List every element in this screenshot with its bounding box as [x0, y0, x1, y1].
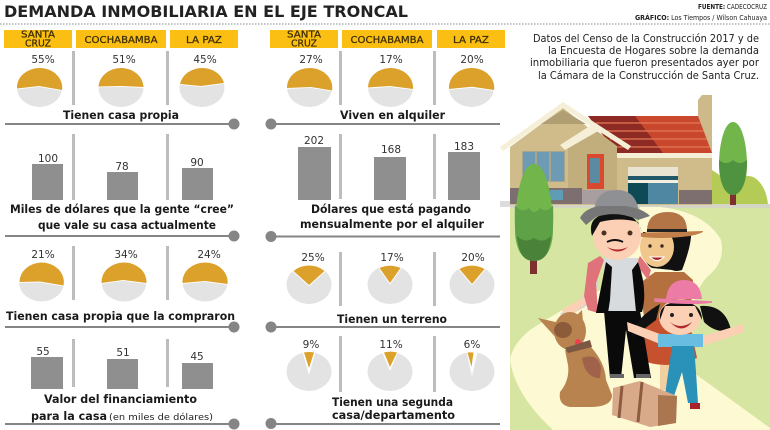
header: right city labels: COCHABAMBA: [350, 35, 424, 46]
panel: tienen casa propia: [5, 51, 240, 130]
hedge: [712, 170, 768, 204]
panel: miles de dolares casa: [5, 134, 240, 242]
label: Miles de dólares que la gente “cree”: [10, 202, 234, 216]
head: [593, 212, 641, 260]
label: [332, 395, 455, 422]
path: [510, 207, 770, 430]
header: left city labels: CRUZ: [25, 38, 51, 50]
pie: Cochabamba 17%: [368, 54, 413, 107]
pie: Santa Cruz 27%: 27%: [299, 54, 323, 66]
bar: La Paz 90: [182, 157, 213, 200]
bar: Cochabamba 78: 78: [115, 161, 129, 173]
pie: Cochabamba 17%: [368, 252, 412, 304]
pie: Cochabamba 11%: [368, 339, 412, 391]
body patch: [582, 356, 601, 378]
door: [587, 154, 604, 189]
pie: Cochabamba 17%: 17%: [379, 54, 403, 66]
pie: Santa Cruz 25%: [286, 252, 332, 304]
title: DEMANDA INMOBILIARIA EN EL EJE TRONCAL: [4, 2, 408, 21]
bar: La Paz 45: [182, 351, 213, 389]
pie: La Paz 45%: [180, 54, 224, 107]
bar: Santa Cruz 202: [298, 135, 331, 200]
label: Tienen casa propia que la compraron: [6, 309, 235, 323]
intro text: inmobiliaria que fueron presentados ayer por: [530, 57, 760, 69]
panel: segunda casa: [266, 336, 500, 429]
label: Tienen casa propia: [63, 108, 179, 122]
arm: [560, 273, 598, 318]
bar: Cochabamba 78: [107, 161, 138, 200]
tree left: [515, 164, 553, 274]
man: [560, 190, 651, 378]
label: Tienen un terreno: [337, 312, 447, 326]
head: [554, 312, 586, 350]
tree right: [719, 122, 747, 205]
pie: Cochabamba 51%: 51%: [112, 54, 136, 66]
bar: Santa Cruz 55: 55: [36, 346, 50, 358]
pie: Cochabamba 11%: 11%: [379, 339, 403, 351]
label: Valor del financiamiento: [44, 392, 197, 406]
pie: La Paz 20%: 20%: [461, 252, 485, 264]
suitcase: [612, 381, 677, 427]
hair: [642, 232, 691, 271]
pie: La Paz 24%: 24%: [197, 249, 221, 261]
bar: La Paz 90: 90: [190, 157, 204, 169]
pie: Cochabamba 17%: 17%: [380, 252, 404, 264]
pie: La Paz 6%: [450, 339, 494, 391]
intro text: la Encuesta de Hogares sobre la demanda: [548, 45, 759, 57]
pie: Santa Cruz 55%: [17, 54, 62, 107]
label: Tienen una segunda: [332, 395, 453, 409]
gable trim: [500, 102, 631, 151]
label: que vale su casa actualmente: [38, 218, 216, 232]
windows: [522, 151, 565, 200]
pie: Santa Cruz 25%: 25%: [301, 252, 325, 264]
pie: Cochabamba 51%: [98, 54, 144, 107]
head: [659, 299, 701, 335]
porch: [568, 128, 617, 190]
header: left city labels: SANTA: [21, 30, 55, 40]
arms: [627, 322, 660, 344]
bar: Santa Cruz 202: 202: [304, 135, 324, 147]
intro text: la Cámara de la Construcción de Santa Cruz.: [538, 70, 759, 82]
pie: Santa Cruz 55%: 55%: [31, 54, 55, 66]
panel: casa propia comprada: [5, 246, 240, 332]
hat: [594, 190, 639, 214]
pie: La Paz 20%: [450, 252, 494, 304]
sleeves: [658, 334, 703, 347]
girl: [627, 280, 744, 409]
panel: dolares por alquiler: [266, 134, 500, 242]
vest: [596, 262, 612, 313]
ears: [538, 318, 560, 340]
pie: Santa Cruz 9%: 9%: [303, 339, 319, 351]
bar: Santa Cruz 100: 100: [38, 153, 58, 165]
pie: La Paz 20%: 20%: [460, 54, 484, 66]
pie: Santa Cruz 27%: [287, 54, 332, 107]
label: [31, 392, 213, 423]
red roof: [588, 116, 712, 153]
trousers: [604, 311, 651, 378]
bag: [640, 272, 693, 318]
pie: Cochabamba 34%: 34%: [114, 249, 138, 261]
pack: [584, 256, 604, 313]
garage: [628, 167, 678, 204]
bar: Cochabamba 51: 51: [116, 347, 130, 359]
skirt: [637, 315, 697, 365]
panel: tienen un terreno: [266, 252, 500, 332]
shirt: [604, 258, 640, 311]
house wall: [510, 108, 617, 205]
header: left city labels: COCHABAMBA: [84, 35, 158, 46]
bar: La Paz 183: [448, 141, 480, 200]
pie: La Paz 45%: 45%: [193, 54, 217, 66]
header: left city labels: [4, 30, 238, 50]
panel: viven en alquiler: [266, 51, 500, 130]
illustration: house and family: [500, 95, 770, 430]
bar: Cochabamba 51: [107, 347, 138, 389]
source credits: [635, 3, 767, 22]
overalls: [664, 346, 698, 403]
face: [640, 227, 674, 267]
pie: La Paz 24%: [182, 249, 228, 302]
pie: Santa Cruz 9%: [286, 339, 332, 391]
pie: Cochabamba 34%: [101, 249, 147, 302]
label: mensualmente por el alquiler: [300, 217, 484, 231]
pie: La Paz 6%: 6%: [464, 339, 480, 351]
face patch: [554, 322, 572, 338]
label: casa/departamento: [332, 408, 455, 422]
collar: [565, 340, 592, 353]
label: para la casa: [31, 409, 107, 423]
header: left city labels: LA PAZ: [186, 35, 222, 46]
lawn: [510, 205, 770, 430]
base: [510, 188, 582, 204]
chimney: [698, 95, 712, 155]
bar: La Paz 183: 183: [454, 141, 474, 153]
bar: Santa Cruz 100: [32, 153, 63, 200]
label: [300, 202, 484, 231]
pigtails: [700, 306, 731, 331]
bar: La Paz 45: 45: [190, 351, 204, 363]
intro text: [530, 33, 760, 82]
hand: [562, 297, 588, 320]
panel: valor del financiamiento: [5, 339, 240, 430]
woman: [635, 212, 703, 390]
label: (en miles de dólares): [109, 412, 213, 423]
header: right city labels: [270, 30, 505, 50]
pie: Santa Cruz 21%: 21%: [31, 249, 55, 261]
intro text: Datos del Censo de la Construcción 2017 y de: [533, 33, 759, 45]
bar: Cochabamba 168: [374, 144, 406, 200]
label: Dólares que está pagando: [311, 202, 471, 216]
body: [560, 346, 612, 407]
label: [10, 202, 234, 232]
header: right city labels: CRUZ: [291, 38, 317, 50]
tongue: [575, 339, 581, 347]
pie: La Paz 20%: [449, 54, 494, 107]
header: right city labels: LA PAZ: [453, 35, 489, 46]
steps: [582, 190, 612, 204]
header: right city labels: SANTA: [287, 30, 321, 40]
legs: [660, 360, 683, 390]
hat: [666, 280, 702, 299]
pie: Santa Cruz 21%: [19, 249, 64, 302]
dog: [538, 310, 612, 407]
bar: Santa Cruz 55: [31, 346, 63, 389]
hat: [647, 212, 687, 231]
bar: Cochabamba 168: 168: [381, 144, 401, 156]
label: Viven en alquiler: [340, 108, 445, 122]
